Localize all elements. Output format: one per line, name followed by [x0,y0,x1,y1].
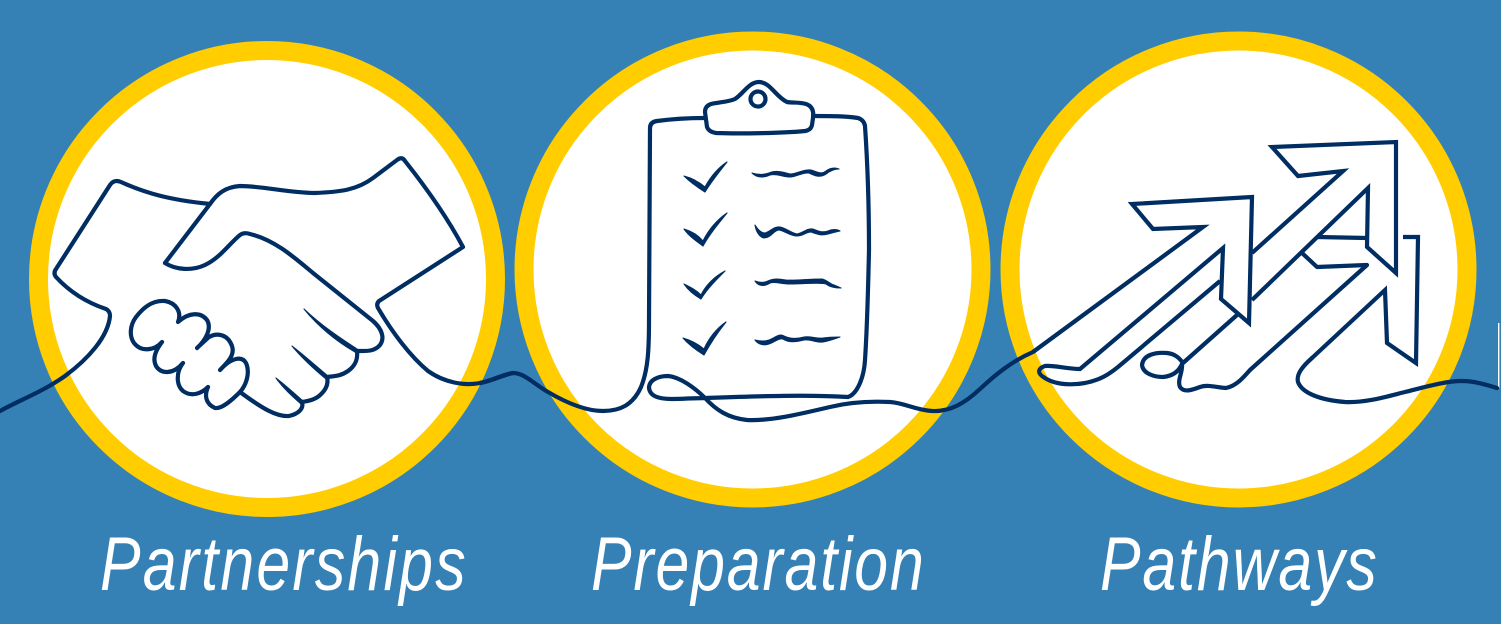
squiggle lines [752,168,841,345]
circle: partnerships [38,50,496,508]
label: Partnerships: Partnerships [100,522,466,607]
icon: clipboard [480,82,1033,420]
circle: pathways [1010,41,1467,498]
label: Preparation: Preparation [591,522,924,607]
label: Pathways: Pathways [1100,522,1377,607]
icon: rising arrows [1033,142,1497,402]
icon: handshake [0,158,513,416]
circle: preparation [524,41,981,498]
check marks [683,162,727,355]
